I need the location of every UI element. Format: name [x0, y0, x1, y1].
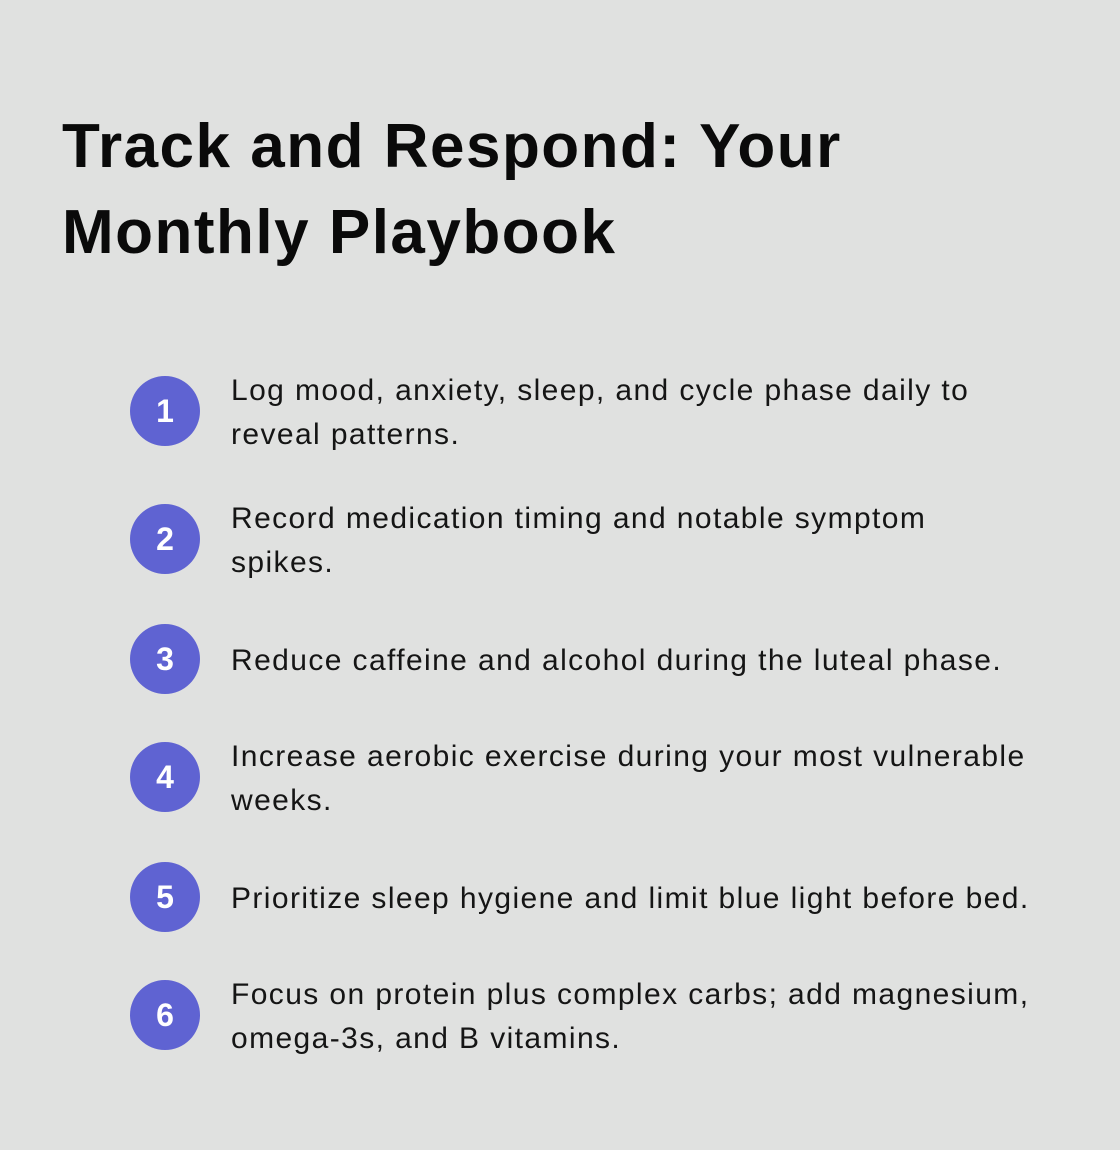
title [62, 112, 842, 267]
badge 3 [130, 624, 200, 694]
badge 4: 4 [156, 758, 174, 794]
badge 3: 3 [156, 640, 174, 676]
badge 1: 1 [156, 392, 174, 428]
badge 4 [130, 742, 200, 812]
text 6 [231, 978, 1029, 1055]
item 1 [130, 374, 969, 451]
text 1: Log mood, anxiety, sleep, and cycle phase daily to [231, 374, 969, 407]
text 1: reveal patterns. [231, 418, 460, 451]
badge 6: 6 [156, 996, 174, 1032]
text 2: Record medication timing and notable symptom [231, 502, 926, 535]
text 6: omega-3s, and B vitamins. [231, 1022, 621, 1055]
badge 5: 5 [156, 878, 174, 914]
title: Monthly Playbook [62, 198, 616, 267]
badge 1 [130, 376, 200, 446]
item 5 [130, 862, 1030, 932]
text 2 [231, 502, 926, 579]
text 4: Increase aerobic exercise during your most vulnerable [231, 740, 1026, 773]
badge 6 [130, 980, 200, 1050]
text 2: spikes. [231, 546, 334, 579]
text 5: Prioritize sleep hygiene and limit blue light before bed. [231, 882, 1030, 915]
text 1 [231, 374, 969, 451]
text 3: Reduce caffeine and alcohol during the luteal phase. [231, 644, 1002, 677]
badge 2: 2 [156, 520, 174, 556]
item 2 [130, 502, 926, 579]
text 4: weeks. [231, 784, 333, 817]
text 4 [231, 740, 1026, 817]
item 6 [130, 978, 1029, 1055]
item 3 [130, 624, 1002, 694]
badge 5 [130, 862, 200, 932]
title: Track and Respond: Your [62, 112, 842, 181]
badge 2 [130, 504, 200, 574]
text 6: Focus on protein plus complex carbs; add magnesium, [231, 978, 1029, 1011]
item 4 [130, 740, 1026, 817]
